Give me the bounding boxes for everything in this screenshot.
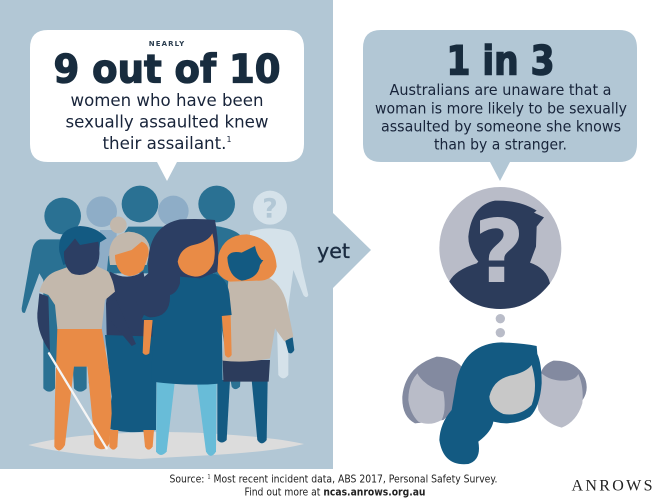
illustration: group of people [22, 186, 308, 459]
figure: woman with cane [37, 226, 115, 450]
panel: right speech bubble [363, 30, 637, 181]
text: right statement: woman is more likely to be sexually [375, 99, 627, 117]
face: central woman [439, 342, 542, 464]
footer: source: Source: [170, 472, 211, 486]
footer: source: Find out more at ncas.anrows.org.au [244, 486, 426, 498]
text: left statement: sexually assaulted knew [66, 112, 269, 132]
label: nearly: NEARLY [149, 40, 185, 48]
panel: left speech bubble [30, 30, 304, 181]
text: right statement: than by a stranger. [434, 135, 567, 153]
icon: unknown person portrait [439, 187, 561, 309]
heading: 1 in 3: 1 in 3 [446, 38, 554, 84]
figure: woman with red hair [217, 234, 294, 443]
footer: source: 1 [207, 474, 211, 480]
white cane [49, 353, 107, 448]
figure: unknown person [250, 191, 308, 378]
ground shadow [28, 432, 304, 459]
figures: light background heads [86, 196, 189, 383]
figure: central woman [136, 219, 232, 456]
yet arrow: yet [317, 239, 350, 263]
heading: 9 out of 10: 9 out of 10 [54, 48, 280, 92]
footer: source [170, 472, 498, 498]
logo: ANROWS: ANROWS [572, 478, 652, 494]
illustration: unknown person and familiar faces [402, 187, 587, 464]
text: left statement: their assailant. [102, 134, 229, 154]
figures: teal background people [22, 186, 247, 392]
question mark: ? [474, 201, 525, 303]
footer: source: Most recent incident data, ABS 2017, Personal Safety Survey. [211, 472, 498, 486]
face: right person [537, 361, 587, 428]
text: left statement [66, 91, 269, 154]
left background panel [0, 0, 333, 469]
yet arrow [317, 213, 371, 288]
text: right statement: Australians are unaware that a [390, 81, 612, 99]
text: left statement: women who have been [70, 91, 264, 111]
text: left statement: 1 [226, 135, 232, 144]
thought dots [496, 314, 505, 337]
face: left person [402, 357, 462, 424]
figure: woman with bun [105, 217, 157, 450]
icon: question mark: ? [262, 193, 278, 224]
text: right statement [375, 81, 627, 153]
text: right statement: assaulted by someone she knows [381, 118, 621, 136]
